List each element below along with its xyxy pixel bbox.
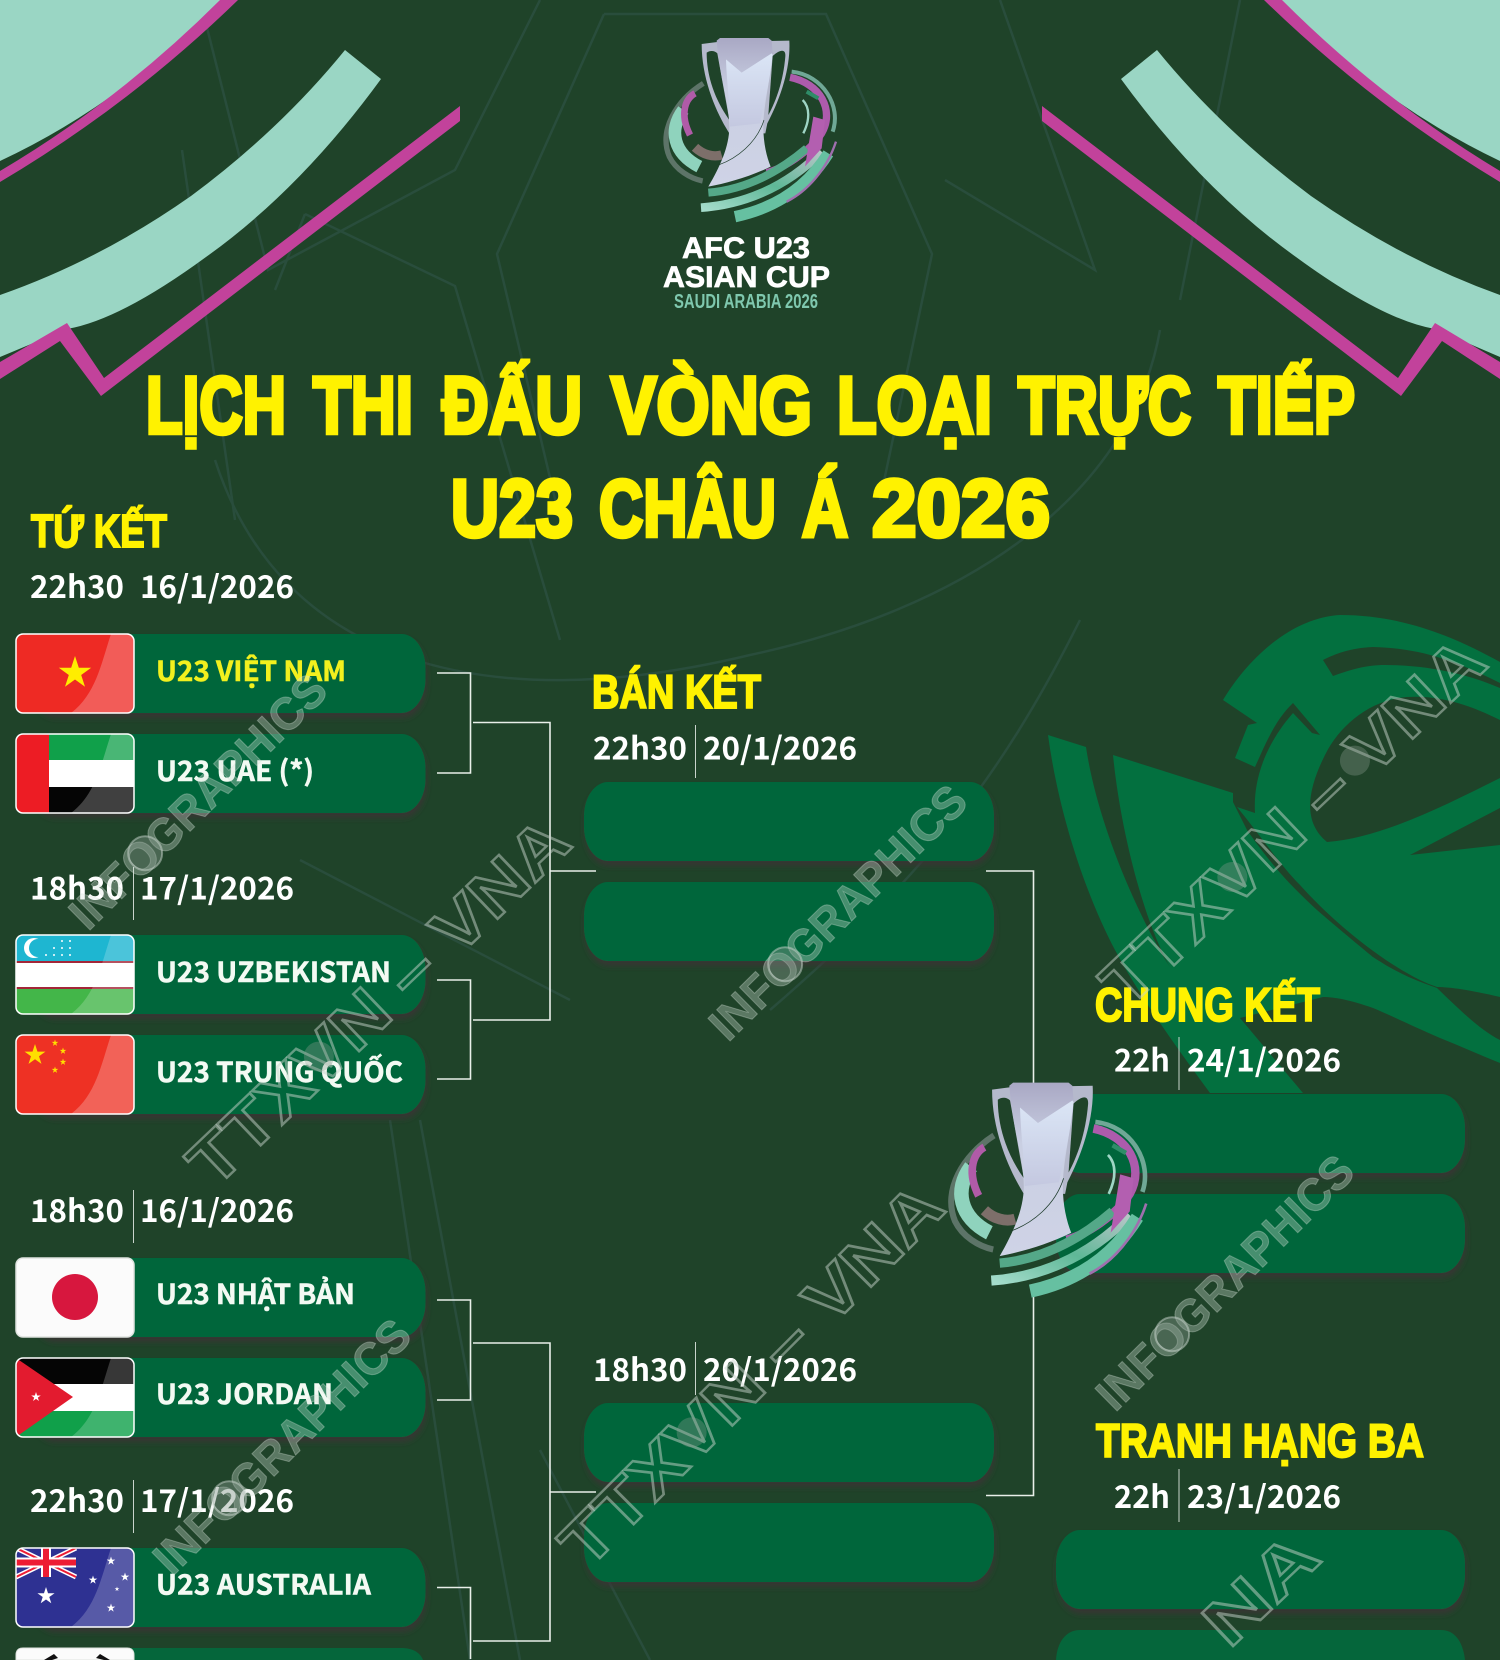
team name: Australia: U23 AUSTRALIA bbox=[156, 1564, 372, 1604]
logo text: AFC U23: AFC U23 bbox=[682, 232, 810, 265]
title: 2026 bbox=[872, 464, 1050, 554]
title: THI bbox=[313, 361, 413, 451]
logo text: Saudi Arabia 2026: SAUDI ARABIA 2026 bbox=[674, 290, 818, 313]
date: match 4: 17/1/2026 bbox=[140, 1476, 294, 1521]
title: U23 bbox=[451, 464, 573, 554]
date: final: 24/1/2026 bbox=[1187, 1036, 1341, 1080]
date: match 4 bbox=[30, 1476, 294, 1533]
title: LỊCH bbox=[146, 361, 286, 451]
watermarks bbox=[59, 622, 1499, 1660]
date: match 4: 22h30 bbox=[30, 1476, 124, 1521]
date: match 3: 16/1/2026 bbox=[140, 1186, 294, 1231]
date: match 2: 17/1/2026 bbox=[140, 864, 294, 908]
watermarks: INFOGRAPHICS bbox=[59, 663, 337, 939]
team name: China: U23 TRUNG QUỐC bbox=[156, 1051, 403, 1091]
pill: third-place slot, cut by page edge bbox=[1056, 1630, 1465, 1660]
title: LOẠI bbox=[837, 361, 992, 451]
logo text: Asian Cup: ASIAN CUP bbox=[663, 261, 830, 294]
pills: quarter-final teams bbox=[30, 634, 426, 1627]
icon: trophy bbox=[666, 38, 836, 217]
pills: semi-final slots bbox=[584, 782, 994, 1582]
heading: semi-finals: BÁN KẾT bbox=[592, 665, 761, 718]
date: match 2 bbox=[30, 864, 294, 920]
title bbox=[146, 360, 1355, 554]
heading: final: CHUNG KẾT bbox=[1095, 978, 1320, 1031]
team name: Uzbekistan: U23 UZBEKISTAN bbox=[156, 951, 391, 991]
title: CHÂU bbox=[599, 463, 776, 554]
heading: quarter-finals: TỨ KẾT bbox=[31, 505, 167, 557]
date: match 2: 18h30 bbox=[30, 864, 124, 908]
date: semi-final 2: 20/1/2026 bbox=[703, 1345, 857, 1390]
watermarks: TTXVN – VNA bbox=[1086, 622, 1499, 1020]
flag: Japan bbox=[16, 1258, 134, 1337]
watermarks: NA bbox=[1188, 1517, 1333, 1660]
flag: South Korea, cut by page edge bbox=[16, 1648, 134, 1660]
date: semi-final 1 bbox=[593, 724, 857, 778]
title: VÒNG bbox=[611, 360, 812, 451]
title: TRỰC bbox=[1018, 361, 1191, 451]
title: ĐẤU bbox=[442, 360, 582, 451]
date: final: 22h bbox=[1114, 1036, 1170, 1080]
heading: third place: TRANH HẠNG BA bbox=[1096, 1414, 1424, 1467]
bracket connectors bbox=[437, 673, 1034, 1659]
large green AFC emblem in background bbox=[1048, 615, 1500, 1093]
flag: UAE bbox=[16, 734, 134, 813]
team name: Vietnam: U23 VIỆT NAM bbox=[156, 650, 346, 690]
watermarks: INFOGRAPHICS bbox=[699, 774, 977, 1050]
pill: last quarter-final team, cut by page edge bbox=[30, 1648, 423, 1660]
watermarks: INFOGRAPHICS bbox=[143, 1308, 421, 1584]
top-right decoration bbox=[1042, 0, 1500, 396]
flag: Vietnam bbox=[16, 634, 134, 713]
team name: UAE: U23 UAE (*) bbox=[156, 750, 314, 790]
flag: Uzbekistan bbox=[16, 935, 134, 1014]
date: match 1 bbox=[30, 562, 294, 607]
date: match 3 bbox=[30, 1186, 294, 1243]
date: semi-final 1: 20/1/2026 bbox=[703, 724, 857, 768]
flag: China bbox=[16, 1035, 134, 1114]
tournament logo: trophy and name bbox=[663, 38, 836, 313]
title: TIẾP bbox=[1218, 360, 1355, 451]
date: semi-final 2 bbox=[593, 1342, 857, 1395]
date: third place: 22h bbox=[1114, 1472, 1170, 1517]
icon: central trophy bbox=[951, 1083, 1146, 1291]
flag: Jordan bbox=[16, 1358, 134, 1437]
date: match 3: 18h30 bbox=[30, 1186, 124, 1231]
flag: Australia bbox=[16, 1548, 134, 1627]
watermarks: TTXVN – VNA bbox=[545, 1168, 958, 1581]
team name: Japan: U23 NHẬT BẢN bbox=[156, 1273, 355, 1313]
top-left decoration bbox=[0, 0, 460, 396]
pill: third-place slot bbox=[1056, 1530, 1465, 1609]
date: third place bbox=[1114, 1469, 1341, 1522]
watermarks: INFOGRAPHICS bbox=[1086, 1144, 1364, 1420]
team name: Jordan: U23 JORDAN bbox=[156, 1373, 333, 1413]
date: final bbox=[1114, 1036, 1341, 1090]
pills: final slots bbox=[1056, 1094, 1465, 1273]
faint background line pattern bbox=[182, 0, 1240, 1660]
date: semi-final 1: 22h30 bbox=[593, 724, 687, 768]
date: match 1: 22h30 bbox=[30, 562, 124, 607]
date: semi-final 2: 18h30 bbox=[593, 1345, 687, 1390]
date: third place: 23/1/2026 bbox=[1187, 1472, 1341, 1517]
watermarks: TTXVN – VNA bbox=[173, 803, 584, 1200]
title: Á bbox=[802, 464, 848, 554]
date: match 1: 16/1/2026 bbox=[140, 562, 294, 607]
